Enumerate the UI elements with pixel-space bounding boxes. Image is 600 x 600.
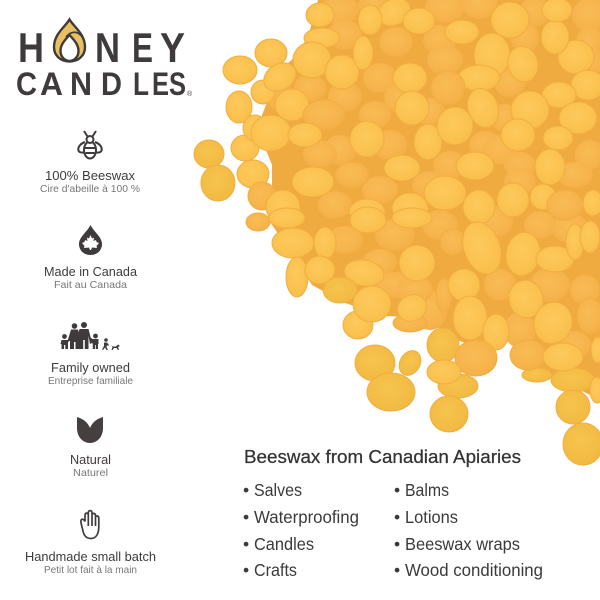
logo word: CANDLES: N: [70, 66, 92, 102]
uses list: right column: Wood conditioning: [405, 560, 543, 580]
feature: Made in Canada: [44, 225, 138, 291]
uses list: right column: Beeswax wraps: [405, 534, 520, 554]
uses list: right column: •: [394, 480, 400, 500]
logo word: HONEY: Y: [160, 24, 185, 71]
registered mark: ®: [187, 90, 193, 98]
label: Made in Canada: Made in Canada: [44, 264, 138, 279]
uses list: left column: •: [243, 534, 249, 554]
feature: Family owned: [48, 322, 133, 387]
logo word: HONEY: H: [18, 24, 44, 71]
logo word: CANDLES: A: [40, 66, 63, 102]
uses list: right column: •: [394, 560, 400, 580]
beeswax pellets pile: [194, 0, 600, 465]
uses list: left column: Salves: [254, 480, 302, 500]
uses list: left column: Candles: [254, 534, 314, 554]
uses list: right column: [394, 480, 543, 580]
logo word: CANDLES: L: [133, 66, 149, 102]
label: Family owned: Family owned: [51, 360, 130, 375]
logo flame icon: [54, 20, 85, 62]
logo word: CANDLES: C: [16, 66, 37, 102]
logo word: HONEY: [18, 24, 185, 71]
uses list: left column: Waterproofing: [254, 507, 359, 527]
label: Naturel: Naturel: [73, 467, 108, 479]
icon: drop with maple leaf: [79, 225, 102, 255]
uses list: left column: Crafts: [254, 560, 297, 580]
uses list: left column: •: [243, 560, 249, 580]
uses list: right column: Lotions: [405, 507, 458, 527]
logo word: CANDLES: E: [152, 66, 169, 102]
label: Fait au Canada: Fait au Canada: [54, 279, 127, 291]
uses list: left column: [243, 480, 359, 580]
uses list: left column: •: [243, 480, 249, 500]
label: Natural: Natural: [70, 452, 111, 467]
logo word: CANDLES: D: [101, 66, 122, 102]
feature: 100% Beeswax: [40, 131, 140, 195]
feature: Handmade small batch: [25, 511, 156, 576]
icon: tulip leaf: [77, 417, 103, 443]
uses list: right column: •: [394, 507, 400, 527]
icon: bee: [78, 131, 102, 158]
label: Entreprise familiale: Entreprise familiale: [48, 375, 133, 387]
logo word: CANDLES: [16, 66, 186, 102]
uses list: right column: Balms: [405, 480, 449, 500]
label: Handmade small batch: Handmade small batch: [25, 549, 156, 564]
logo: Honey Candles: [16, 20, 193, 102]
heading: Beeswax from Canadian Apiaries: Beeswax from Canadian Apiaries: [244, 446, 521, 467]
logo word: CANDLES: S: [169, 66, 186, 102]
logo word: HONEY: N: [95, 24, 120, 71]
icon: hand: [81, 511, 99, 538]
label: French beeswax: Cire d'abeille à 100 %: [40, 183, 140, 195]
label: 100% Beeswax: 100% Beeswax: [45, 168, 135, 183]
logo word: HONEY: E: [132, 24, 153, 71]
feature: Natural: [70, 417, 111, 479]
label: Petit lot fait a la main: Petit lot fait à la main: [44, 564, 137, 576]
uses list: right column: •: [394, 534, 400, 554]
icon: family: [60, 322, 120, 350]
uses list: left column: •: [243, 507, 249, 527]
